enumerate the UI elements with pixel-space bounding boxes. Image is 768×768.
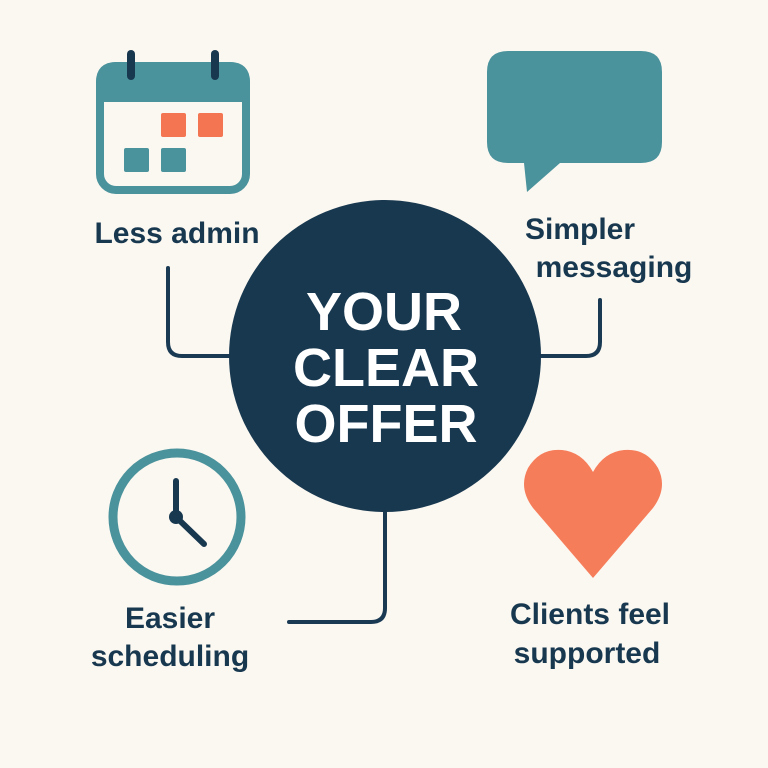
label: easier scheduling: Easier	[125, 602, 215, 635]
central circle	[229, 200, 541, 512]
label: clients feel supported: supported	[514, 637, 660, 670]
title: OFFER	[294, 394, 478, 454]
label: easier scheduling: scheduling	[91, 640, 249, 673]
title: CLEAR	[293, 338, 479, 398]
icon: heart	[524, 450, 662, 578]
connector: easier scheduling	[289, 500, 385, 622]
label: less admin: Less admin	[94, 217, 260, 250]
label: simpler messaging: Simpler	[525, 213, 635, 246]
icon: clock	[113, 453, 241, 581]
label: simpler messaging: messaging	[536, 251, 692, 284]
title: YOUR	[306, 282, 462, 342]
icon: speech bubble	[487, 51, 662, 192]
connector: less admin	[168, 268, 240, 356]
label: clients feel supported: Clients feel	[510, 598, 670, 631]
icon: calendar	[100, 54, 246, 190]
connector: simpler messaging	[530, 300, 600, 356]
